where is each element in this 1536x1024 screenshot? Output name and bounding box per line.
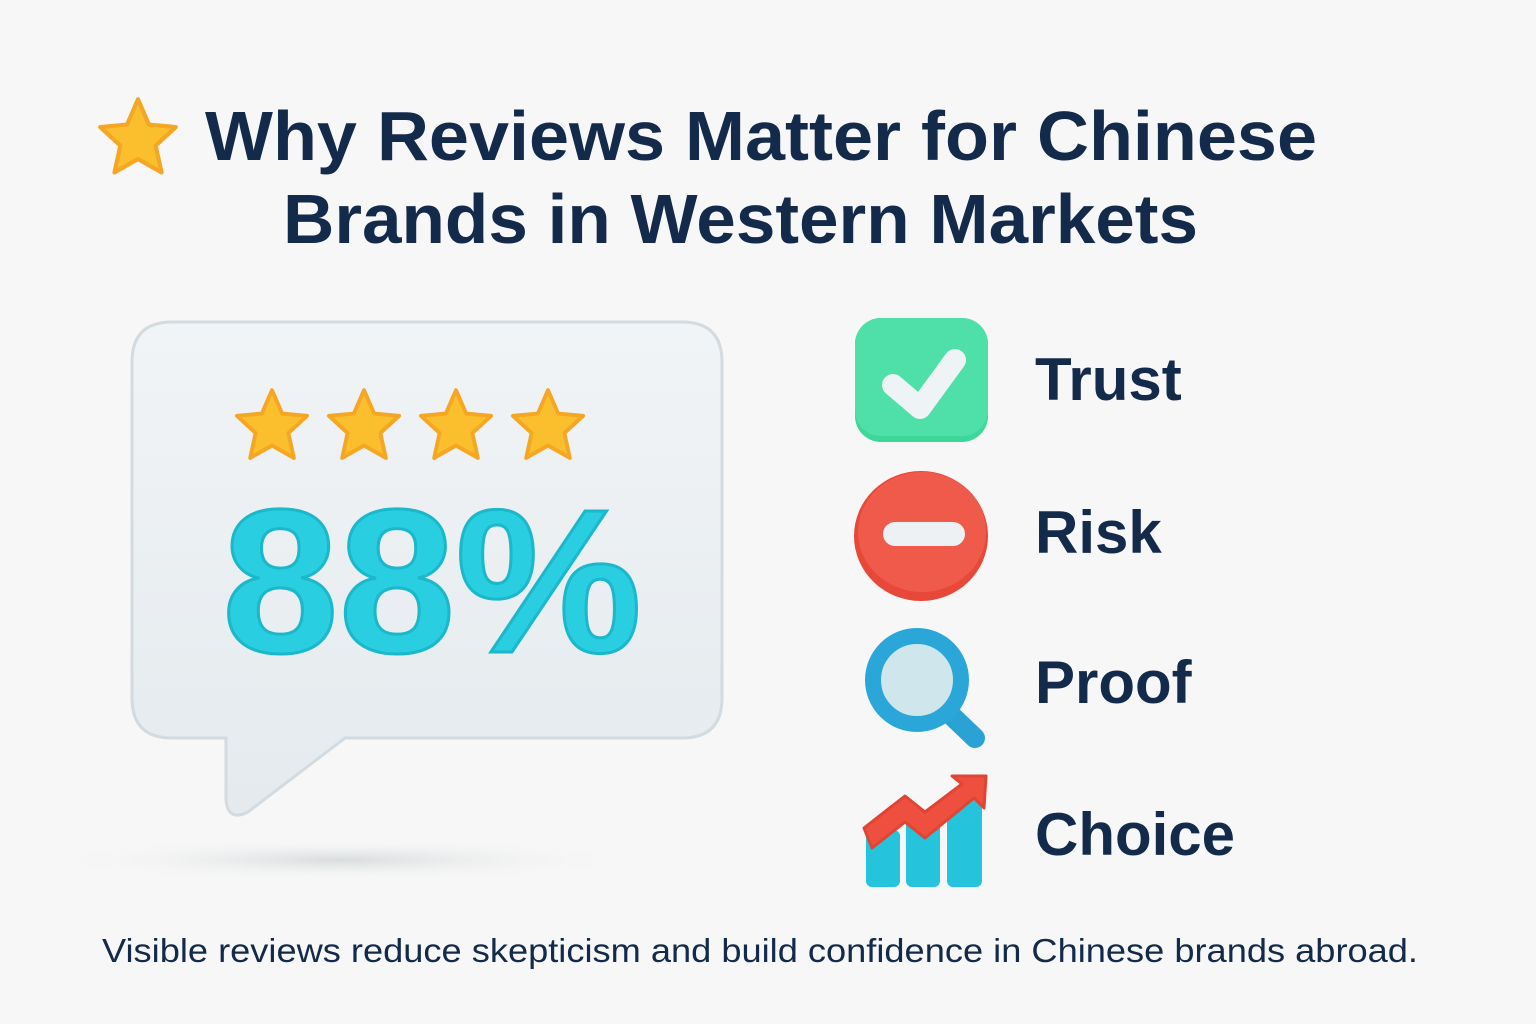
label: Risk: Risk (1035, 499, 1162, 566)
icon: proof magnifier (873, 636, 975, 738)
label: Choice: Choice (1035, 801, 1235, 868)
label: Trust: Trust (1035, 346, 1182, 413)
icon: trust check (855, 318, 988, 442)
stars rating (237, 390, 583, 458)
panel: speech bubble (40, 322, 722, 882)
title: Brands in Western Markets (283, 180, 1198, 258)
icon: choice chart (864, 776, 986, 887)
big number 88%: 88% (222, 467, 642, 696)
caption: Visible reviews reduce skepticism and build confidence in Chinese brands abroad. (102, 932, 1418, 969)
title: Why Reviews Matter for Chinese (205, 97, 1317, 175)
icon: title star (100, 99, 176, 172)
icon: risk minus (854, 471, 988, 601)
title (205, 97, 1317, 258)
label: Proof: Proof (1035, 649, 1193, 716)
